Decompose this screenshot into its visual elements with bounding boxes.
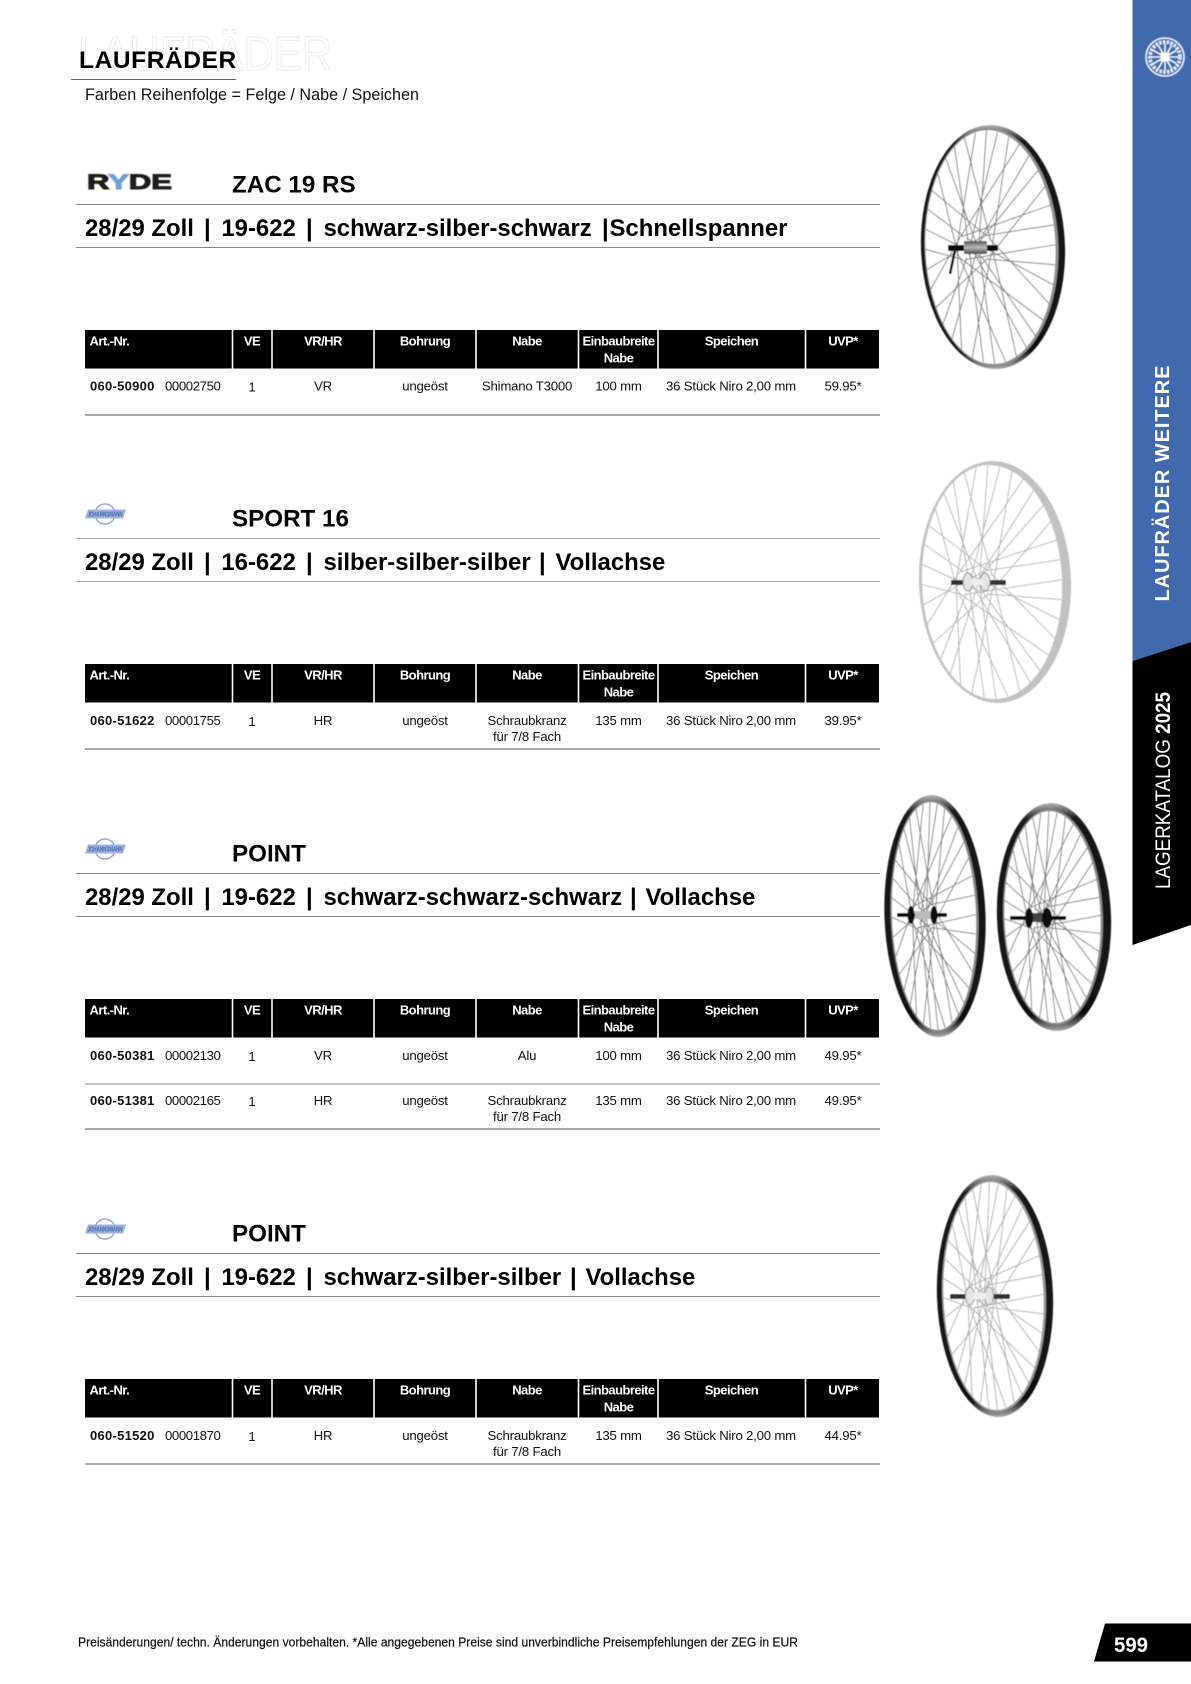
- table: 59.95*: [825, 378, 862, 394]
- table: VR: [314, 378, 332, 394]
- product specification heading: |: [204, 215, 211, 242]
- table: 39.95*: [825, 713, 862, 728]
- table: [85, 330, 880, 415]
- table: HR: [314, 1093, 332, 1108]
- product specification heading: |: [204, 549, 211, 576]
- table: 135 mm: [595, 1093, 642, 1108]
- footer note: Preisänderungen/ techn. Änderungen vorbehalten. *Alle angegebenen Preise sind unverbindliche Preisempfehlungen der ZEG in EUR: [78, 1636, 798, 1650]
- table: für 7/8 Fach: [493, 1444, 561, 1459]
- product specification heading: |: [602, 215, 609, 242]
- product specification heading: |: [539, 549, 546, 576]
- wheel photo: SPORT 16: [915, 458, 1075, 706]
- table: 1: [248, 1049, 256, 1064]
- section: SPORT 16: [76, 504, 880, 749]
- product specification heading: |: [306, 549, 313, 576]
- table: 00002165: [165, 1093, 221, 1108]
- table: 1: [248, 380, 256, 394]
- table: 1: [248, 1094, 256, 1109]
- product specification heading: Schnellspanner: [610, 215, 787, 242]
- page number tab: 599: [1114, 1634, 1148, 1657]
- table: ungeöst: [402, 1428, 448, 1443]
- brand logo: [85, 1219, 126, 1239]
- table: HR: [314, 1428, 332, 1443]
- table: ungeöst: [402, 713, 448, 728]
- table: 00002750: [165, 378, 221, 394]
- table: 00001755: [165, 713, 221, 728]
- sidebar heading: LAUFRÄDER WEITERE: [1151, 366, 1174, 602]
- table: 00001870: [165, 1428, 221, 1443]
- table: 060-50900: [90, 378, 155, 394]
- section: POINT black: [76, 839, 880, 1129]
- product specification heading: 28/29 Zoll: [85, 884, 194, 911]
- table: Schraubkranz: [488, 1428, 566, 1443]
- table: [85, 664, 880, 749]
- product specification heading: |: [204, 1264, 211, 1291]
- wheel photo: POINT silver: [933, 1173, 1057, 1419]
- table: ungeöst: [402, 1093, 448, 1108]
- product specification heading: |: [306, 1264, 313, 1291]
- product name: POINT: [232, 1220, 306, 1248]
- product specification heading: schwarz-silber-silber: [324, 1264, 561, 1291]
- table: Schraubkranz: [488, 1093, 566, 1108]
- table: 1: [248, 1429, 256, 1444]
- table: 135 mm: [595, 713, 642, 728]
- table: 36 Stück Niro 2,00 mm: [666, 1428, 796, 1443]
- product name: ZAC 19 RS: [232, 172, 356, 198]
- product specification heading: |: [630, 884, 637, 911]
- brand logo: [85, 839, 126, 859]
- product specification heading: schwarz-schwarz-schwarz: [324, 884, 622, 911]
- table: 44.95*: [825, 1428, 862, 1443]
- table: 36 Stück Niro 2,00 mm: [666, 378, 796, 394]
- product specification heading: 28/29 Zoll: [85, 1264, 194, 1291]
- page title: LAUFRÄDER: [79, 47, 237, 74]
- page number tab: [1094, 1624, 1191, 1662]
- table: 135 mm: [595, 1428, 642, 1443]
- table: 100 mm: [595, 1048, 642, 1063]
- product specification heading: Vollachse: [646, 884, 755, 911]
- brand logo: [85, 504, 126, 524]
- section: ZAC 19 RS: [76, 171, 880, 415]
- product specification heading: 28/29 Zoll: [85, 549, 194, 576]
- table: für 7/8 Fach: [493, 729, 561, 744]
- table: 36 Stück Niro 2,00 mm: [666, 1093, 796, 1108]
- table: [85, 1379, 880, 1464]
- wheel photo: POINT front: [880, 793, 990, 1039]
- product specification heading: |: [570, 1264, 577, 1291]
- table: 060-51520: [90, 1428, 155, 1443]
- sidebar catalog label: LAGERKATALOG 2025: [1152, 692, 1175, 889]
- table: VR: [314, 1048, 332, 1063]
- product name: SPORT 16: [232, 506, 349, 532]
- wheel photo: POINT rear: [993, 801, 1115, 1033]
- product specification heading: 16-622: [221, 549, 296, 576]
- table: 060-50381: [90, 1048, 155, 1063]
- product specification heading: 19-622: [221, 884, 296, 911]
- product name: POINT: [232, 840, 306, 868]
- product specification heading: 19-622: [221, 1264, 296, 1291]
- product specification heading: 28/29 Zoll: [85, 215, 194, 242]
- section: POINT silver: [76, 1219, 880, 1464]
- table: 060-51622: [90, 713, 155, 728]
- table: 100 mm: [595, 378, 642, 394]
- table: [85, 999, 880, 1129]
- table: Schraubkranz: [488, 713, 566, 728]
- table: ungeöst: [402, 378, 448, 394]
- table: ungeöst: [402, 1048, 448, 1063]
- table: für 7/8 Fach: [493, 1109, 561, 1124]
- product specification heading: schwarz-silber-schwarz: [324, 215, 592, 242]
- product specification heading: |: [306, 215, 313, 242]
- table: Shimano T3000: [482, 378, 572, 394]
- wheel photo: ZAC 19 RS: [917, 123, 1069, 371]
- subtitle: Farben Reihenfolge = Felge / Nabe / Speichen: [85, 86, 419, 104]
- product specification heading: 19-622: [221, 215, 296, 242]
- sidebar: black tab: [1132, 642, 1191, 945]
- table: 36 Stück Niro 2,00 mm: [666, 1048, 796, 1063]
- icon: wheel: [1146, 38, 1184, 76]
- sidebar: blue tab: [1132, 0, 1191, 661]
- table: 1: [248, 714, 256, 729]
- table: 060-51381: [90, 1093, 155, 1108]
- table: Alu: [518, 1048, 536, 1063]
- table: 36 Stück Niro 2,00 mm: [666, 713, 796, 728]
- table: 49.95*: [825, 1093, 862, 1108]
- product specification heading: |: [306, 884, 313, 911]
- product specification heading: silber-silber-silber: [324, 549, 531, 576]
- product specification heading: Vollachse: [556, 549, 665, 576]
- table: 00002130: [165, 1048, 221, 1063]
- background title outline: LAUFRÄDER: [78, 28, 332, 81]
- product specification heading: |: [204, 884, 211, 911]
- table: 49.95*: [825, 1048, 862, 1063]
- table: HR: [314, 713, 332, 728]
- brand logo: Ryde: R Y DE: [87, 171, 172, 194]
- product specification heading: Vollachse: [586, 1264, 695, 1291]
